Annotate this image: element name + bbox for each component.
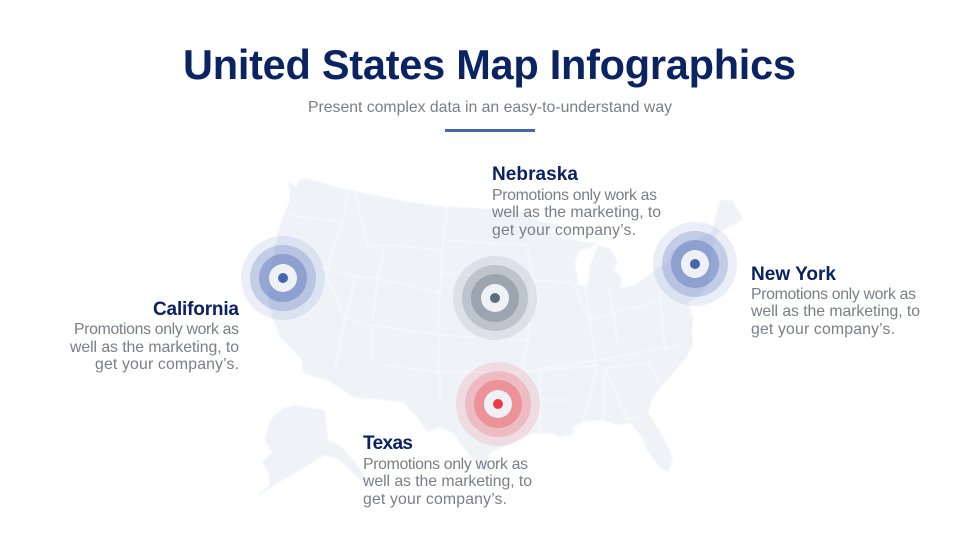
marker: Nebraska [453, 256, 537, 340]
callout: California [69, 299, 239, 373]
callout: New York: New York [751, 264, 836, 285]
callout: Texas: Texas [363, 433, 413, 454]
callout: California: get your company’s. [95, 356, 239, 373]
callout: California: Promotions only work as [74, 321, 239, 338]
callout: Nebraska: Promotions only work as [492, 187, 657, 204]
callout: New York: get your company’s. [751, 321, 895, 338]
marker: Texas [456, 362, 540, 446]
contiguous states [268, 178, 743, 472]
state borders [290, 190, 680, 433]
callout: Texas: well as the marketing, to [362, 473, 532, 490]
callout: Texas [362, 433, 532, 508]
callout: New York: Promotions only work as [751, 286, 916, 303]
callout: California: California [153, 299, 239, 320]
map: United States [253, 178, 743, 500]
callout: Texas: get your company’s. [363, 491, 507, 508]
callout: Nebraska [491, 164, 661, 239]
marker: California [241, 236, 325, 320]
callout: New York: well as the marketing, to [750, 303, 920, 320]
callout: California: well as the marketing, to [69, 339, 239, 356]
Alaska [253, 405, 373, 500]
callout: Nebraska: well as the marketing, to [491, 204, 661, 221]
marker: New York [653, 222, 737, 306]
title: United States Map Infographics [183, 41, 796, 88]
callout: New York [750, 264, 920, 338]
subtitle: Present complex data in an easy-to-understand way [308, 99, 672, 116]
callout: Nebraska: get your company’s. [492, 222, 636, 239]
callout: Nebraska: Nebraska [492, 164, 578, 185]
callout: Texas: Promotions only work as [363, 456, 528, 473]
title underline [445, 129, 535, 132]
